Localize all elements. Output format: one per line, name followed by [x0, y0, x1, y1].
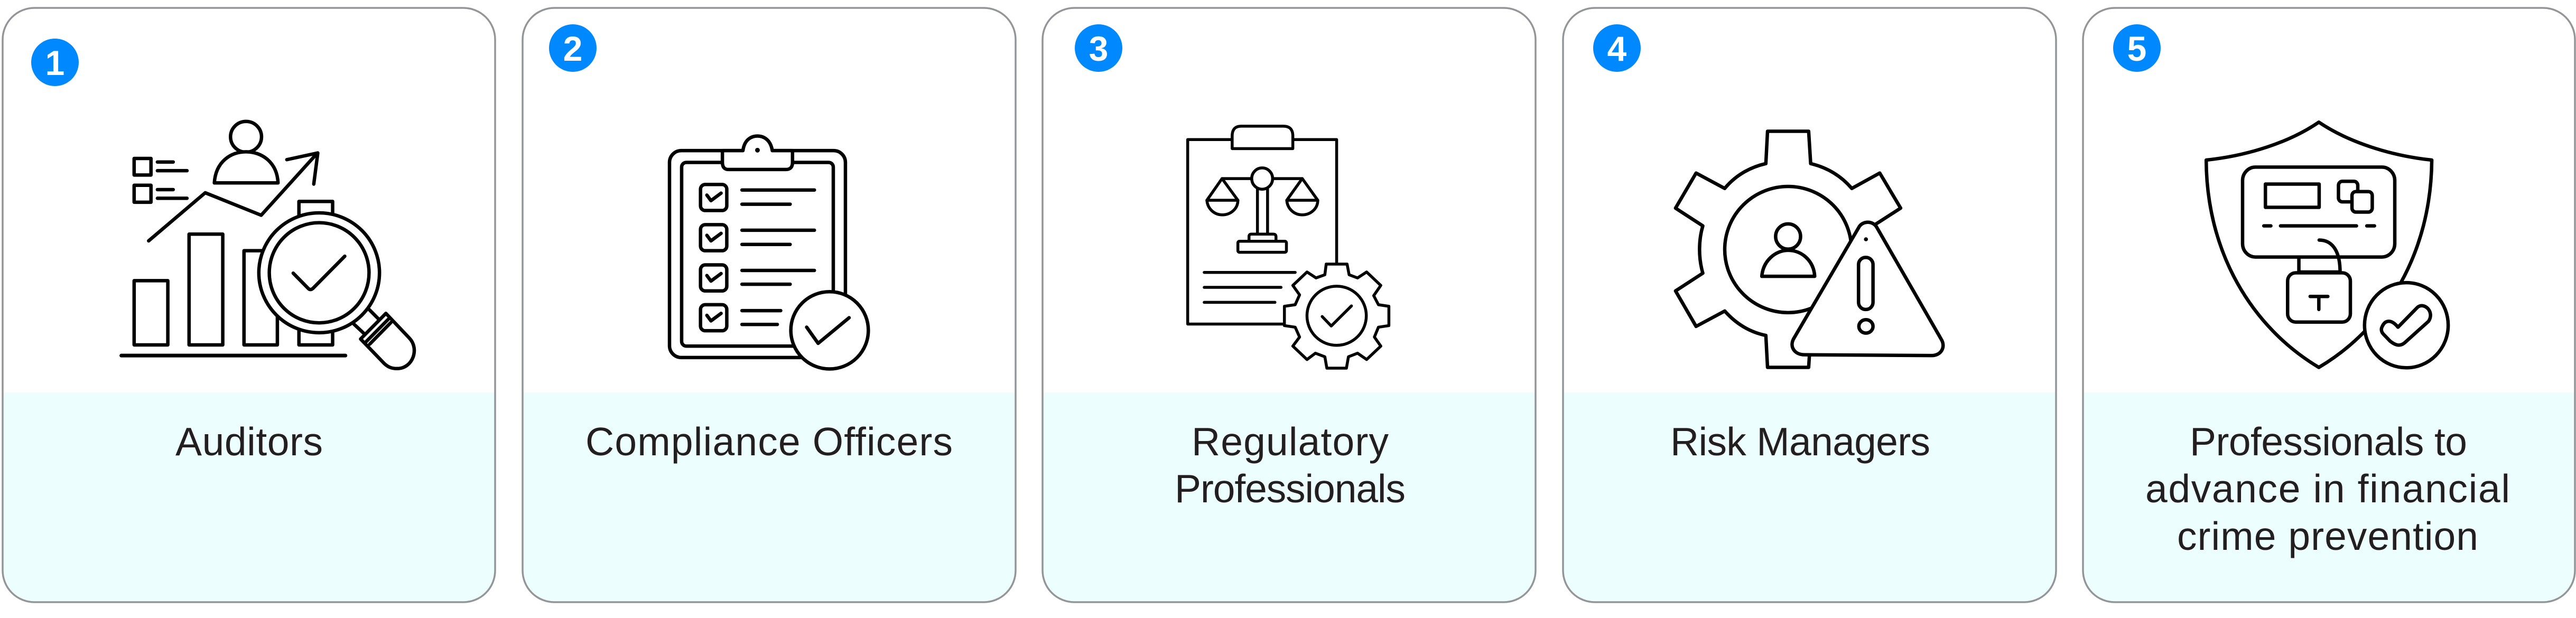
- card border: [2083, 8, 2575, 602]
- label: Professionals to advance in financial crime prevention: crime prevention: [2177, 514, 2478, 558]
- card label background: [3, 392, 495, 602]
- number badge 2: [549, 24, 597, 72]
- label: Regulatory Professionals: Regulatory: [1192, 419, 1389, 464]
- label: Regulatory Professionals: Professionals: [1175, 466, 1406, 511]
- number badge 1: 1: [45, 43, 64, 82]
- label: Professionals to advance in financial crime prevention: advance in financial: [2145, 466, 2510, 511]
- icon: shield with card, lock and check: [2206, 122, 2448, 368]
- card label background: [2083, 392, 2575, 602]
- number badge 2: 2: [563, 29, 582, 68]
- icon: clipboard checklist: [669, 136, 868, 369]
- panel: Auditors card: [3, 8, 495, 602]
- icon: bar chart, person and magnifier: [122, 121, 414, 369]
- label: Compliance Officers: Compliance Officers: [585, 419, 953, 464]
- label: Auditors: Auditors: [175, 419, 323, 464]
- panel: Financial crime prevention card: [2083, 8, 2575, 602]
- card label background: [1563, 392, 2056, 602]
- card label background: [523, 392, 1016, 602]
- card border: [1563, 8, 2056, 602]
- card border: [1043, 8, 1536, 602]
- label: Professionals to advance in financial crime prevention: Professionals to: [2190, 419, 2467, 464]
- number badge 3: 3: [1089, 29, 1108, 68]
- icon: gear with person and warning triangle: [1676, 132, 1943, 368]
- panel: Risk Managers card: [1563, 8, 2056, 602]
- number badge 5: [2113, 24, 2161, 72]
- icon: legal document with scales and gear: [1188, 126, 1389, 368]
- number badge 5: 5: [2127, 29, 2146, 68]
- label: Risk Managers: Risk Managers: [1670, 419, 1930, 464]
- number badge 3: [1075, 24, 1122, 72]
- panel: Compliance Officers card: [523, 8, 1016, 602]
- panel: Regulatory Professionals card: [1043, 8, 1536, 602]
- card label background: [1043, 392, 1536, 602]
- number badge 1: [31, 39, 79, 86]
- label: Regulatory Professionals: [1175, 419, 1406, 511]
- card border: [523, 8, 1016, 602]
- number badge 4: [1593, 24, 1641, 72]
- label: Professionals to advance in financial crime prevention: [2145, 419, 2510, 558]
- card border: [3, 8, 495, 602]
- number badge 4: 4: [1607, 29, 1627, 68]
